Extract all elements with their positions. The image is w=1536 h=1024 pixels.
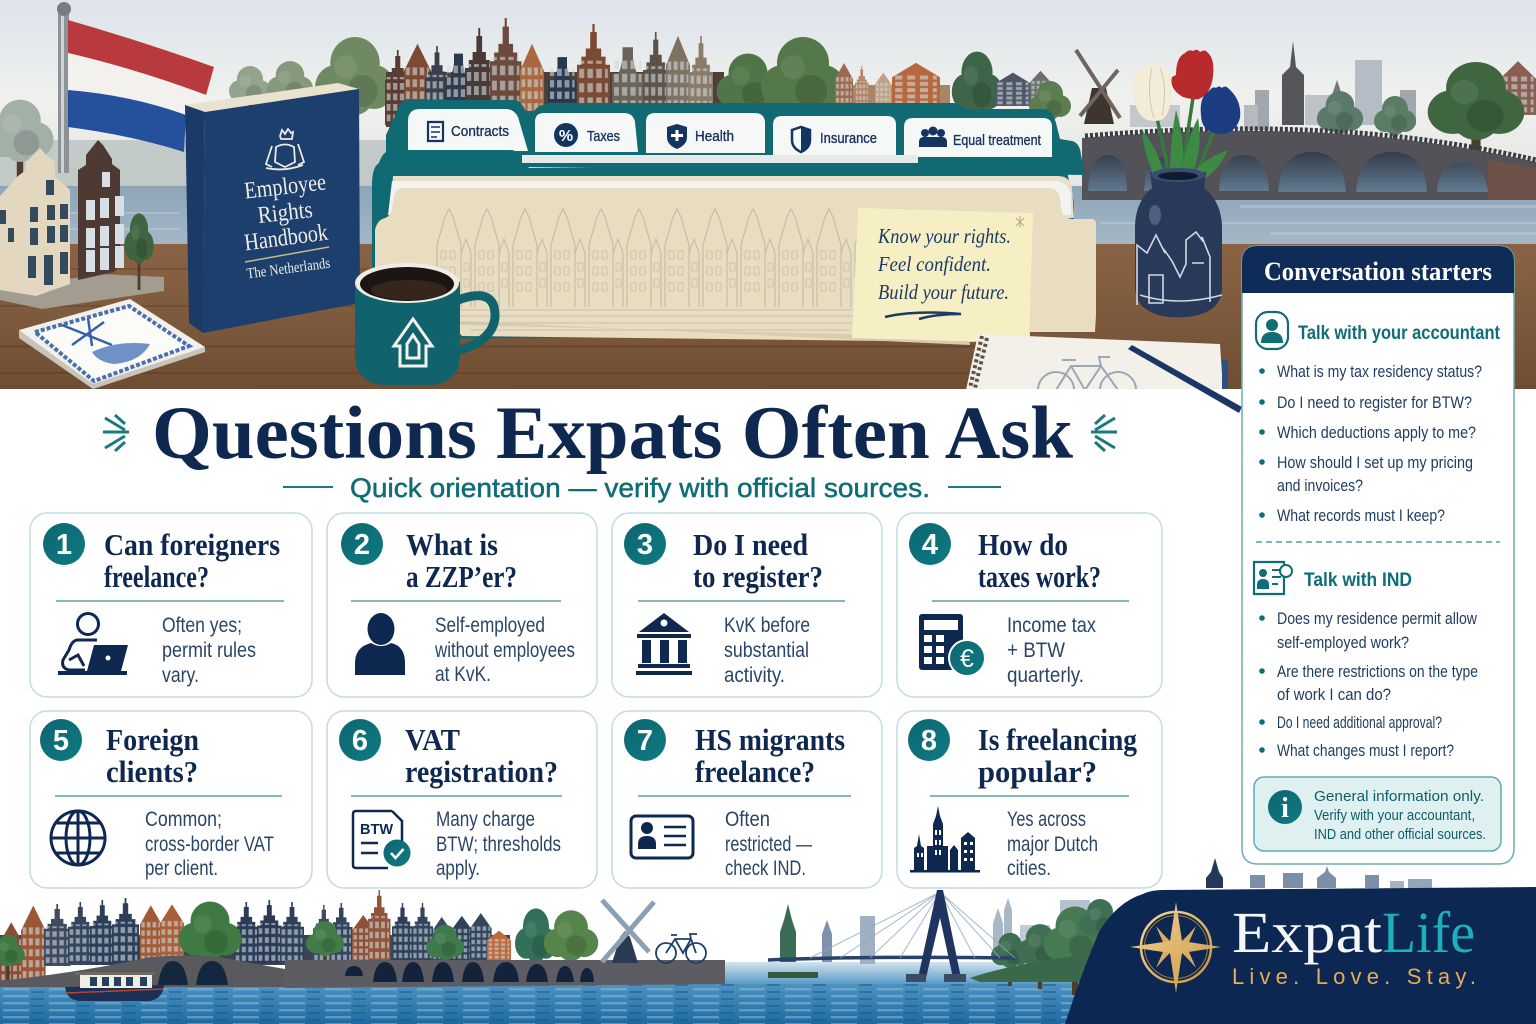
sticky note [852, 208, 1033, 343]
card 2: What is a ZZP'er: 2 [354, 529, 370, 561]
card 8: Is freelancing popular: cities. [1007, 857, 1051, 880]
disclaimer box: IND and other official sources. [1314, 826, 1486, 843]
water reflections [0, 205, 1536, 235]
left ornament [103, 415, 129, 451]
card 2: What is a ZZP'er [327, 513, 597, 697]
compass logo [1130, 902, 1221, 993]
disclaimer box: i [1281, 793, 1289, 824]
cable-stayed bridge [768, 890, 1015, 982]
file organiser [372, 100, 1096, 345]
card 5: Foreign clients: per client. [145, 857, 218, 880]
tab: Health [646, 113, 765, 153]
card 3: Do I need to register [612, 513, 882, 697]
card 6: VAT registration: VAT [405, 722, 460, 757]
card 1: Can foreigners freelance [30, 513, 312, 697]
arched stone bridge [0, 956, 725, 988]
trees and houses, top right of centre [716, 37, 1071, 155]
card 1: Can foreigners freelance: Often yes; [162, 614, 242, 637]
card 1: Can foreigners freelance: Can foreigners [104, 527, 280, 562]
card 5: Foreign clients: clients? [106, 754, 198, 789]
sidebar header [1242, 246, 1514, 293]
icon: globe [51, 811, 105, 865]
manila folder [375, 188, 1096, 342]
icon: calculator with euro [919, 614, 986, 677]
card 2: What is a ZZP'er: without employees [434, 639, 575, 662]
right ornament [1091, 415, 1117, 451]
tab: Insurance: Insurance [820, 130, 877, 147]
icon: person at laptop [58, 614, 128, 675]
card 3: Do I need to register: substantial [724, 639, 809, 662]
card 4: How do taxes work [897, 513, 1162, 697]
tab: Equal treatment: Equal treatment [953, 132, 1042, 149]
card 1: Can foreigners freelance: permit rules [162, 639, 256, 662]
house logo on mug [394, 319, 432, 366]
IND question list [1259, 609, 1478, 760]
wordmark: Expat [1232, 900, 1382, 965]
accountant question list: What records must I keep? [1277, 506, 1445, 525]
tab: Taxes [535, 113, 638, 152]
model canal houses [0, 140, 164, 309]
card 6: VAT registration: apply. [436, 857, 480, 880]
subtitle: Quick orientation — verify with official sources. [350, 473, 930, 503]
tab: Taxes: Taxes [587, 128, 620, 145]
card 3: Do I need to register: 3 [637, 529, 653, 561]
card 7: HS migrants freelance: Often [725, 808, 770, 831]
sticky note: Know your rights. [877, 224, 1011, 248]
windmill, top right [1076, 50, 1120, 124]
card 6: VAT registration [327, 711, 597, 888]
accountant question list: How should I set up my pricing [1277, 453, 1473, 472]
logo panel [1065, 887, 1536, 1024]
book title: Rights [256, 197, 314, 229]
tour boat [65, 972, 164, 1001]
icon: ID card [631, 816, 693, 858]
Delft blue tile [19, 299, 205, 389]
bottom canal illustration [0, 890, 1121, 1024]
card 4: How do taxes work: How do [978, 527, 1068, 562]
accountant question list [1259, 362, 1482, 525]
subheading: accountant: Talk with your accountant [1298, 323, 1501, 344]
card 3: Do I need to register: KvK before [724, 614, 810, 637]
card 7: HS migrants freelance: check IND. [725, 857, 806, 880]
tab: Contracts: Contracts [451, 123, 509, 140]
sky [0, 0, 1536, 195]
back teal folder [386, 100, 1085, 175]
card 5: Foreign clients [30, 711, 312, 888]
windmill [602, 900, 654, 963]
icon: accountant [1256, 312, 1288, 349]
emblem [266, 129, 304, 169]
pen [1128, 345, 1242, 413]
white tulip [1133, 63, 1172, 121]
IND question list: Are there restrictions on the type [1277, 662, 1478, 681]
card 3: Do I need to register: to register? [693, 559, 823, 594]
townhouse row [0, 890, 598, 991]
sidebar: conversation starters [1242, 246, 1514, 864]
icon: IND card [1254, 562, 1292, 594]
front teal folder [372, 150, 1074, 340]
card 3: Do I need to register: activity. [724, 664, 785, 687]
title text: Questions Expats Often Ask [152, 392, 1073, 475]
red tulip [1171, 50, 1213, 99]
disclaimer box: Verify with your accountant, [1314, 807, 1475, 824]
book title: Handbook [243, 220, 329, 256]
subheading: IND: Talk with IND [1304, 570, 1412, 591]
tab: Taxes: % [559, 128, 573, 145]
book title: The Netherlands [246, 256, 331, 282]
card 6: VAT registration: Many charge [436, 808, 535, 831]
disclaimer box: General information only. [1314, 788, 1484, 805]
IND question list: Does my residence permit allow [1277, 609, 1478, 628]
blue tulip [1201, 86, 1240, 134]
card 7: HS migrants freelance: freelance? [695, 754, 815, 789]
stone arch bridge [1082, 129, 1536, 200]
wooden table [0, 244, 1536, 389]
card 5: Foreign clients: 5 [53, 725, 69, 757]
card 2: What is a ZZP'er: at KvK. [435, 663, 491, 686]
accountant question list: and invoices? [1277, 476, 1363, 495]
tagline: Live. Love. Stay. [1232, 964, 1476, 989]
skyline silhouette above logo panel [1206, 858, 1432, 888]
IND question list: of work I can do? [1277, 685, 1391, 704]
book title [243, 169, 331, 282]
tab: Health: Health [695, 128, 734, 145]
Dutch flag on pole [57, 2, 214, 173]
card 6: VAT registration: 6 [352, 725, 368, 757]
card 1: Can foreigners freelance: 1 [56, 529, 72, 561]
card 6: VAT registration: registration? [405, 754, 558, 789]
accountant question list: Do I need to register for BTW? [1277, 393, 1472, 412]
tab: Insurance [773, 116, 896, 155]
water [0, 962, 1105, 1024]
card 8: Is freelancing popular: 8 [921, 725, 937, 757]
card 5: Foreign clients: Foreign [106, 722, 199, 757]
card 7: HS migrants freelance: HS migrants [695, 722, 845, 757]
card 4: How do taxes work: 4 [922, 529, 938, 561]
hero photo scene: desk and Dutch canal [0, 0, 1536, 413]
card 2: What is a ZZP'er: What is [406, 527, 498, 562]
stems and leaves [1157, 98, 1215, 183]
townhouses row, top centre [385, 18, 724, 128]
IND question list: Do I need additional approval? [1277, 713, 1442, 732]
handbook [185, 83, 360, 333]
card 8: Is freelancing popular [897, 711, 1162, 888]
card 1: Can foreigners freelance: freelance? [104, 559, 209, 594]
card 4: How do taxes work: taxes work? [978, 559, 1101, 594]
accountant question list: Which deductions apply to me? [1277, 423, 1476, 442]
card 6: VAT registration: BTW; thresholds [436, 833, 561, 856]
inner papers [390, 176, 1074, 218]
accountant question list: What is my tax residency status? [1277, 362, 1482, 381]
card 4: How do taxes work: + BTW [1007, 639, 1065, 662]
book title: Employee [243, 169, 327, 205]
distant left shoreline [0, 37, 395, 194]
icon: BTW document [353, 811, 410, 868]
tab: Equal treatment [904, 118, 1052, 157]
canal water [0, 186, 1536, 248]
sticky note: Feel confident. [877, 252, 991, 276]
line drawing of canal houses [435, 207, 865, 330]
icon: person silhouette [355, 613, 405, 675]
coffee mug [355, 263, 495, 385]
card 5: Foreign clients: cross-border VAT [145, 833, 274, 856]
title with ornaments [103, 392, 1117, 475]
card 8: Is freelancing popular: Is freelancing [978, 722, 1137, 757]
far skyline and trees [768, 898, 1121, 995]
sidebar header: Conversation starters [1264, 257, 1492, 286]
card 8: Is freelancing popular: Yes across [1007, 808, 1086, 831]
tab: Contracts [408, 109, 528, 151]
card 8: Is freelancing popular: major Dutch [1007, 833, 1098, 856]
card 3: Do I need to register: Do I need [693, 527, 808, 562]
card 7: HS migrants freelance: 7 [637, 725, 653, 757]
card 1: Can foreigners freelance: vary. [162, 664, 199, 687]
card 7: HS migrants freelance: restricted — [725, 833, 812, 856]
card 4: How do taxes work: quarterly. [1007, 664, 1084, 687]
card 7: HS migrants freelance [612, 711, 882, 888]
card 2: What is a ZZP'er: Self-employed [435, 614, 545, 637]
card 5: Foreign clients: Common; [145, 808, 222, 831]
icon: government building [636, 613, 692, 675]
icon: BTW document: BTW [360, 822, 393, 838]
icon: calculator with euro: € [960, 645, 974, 673]
ceramic vase [1135, 172, 1222, 318]
card 8: Is freelancing popular: popular? [978, 754, 1097, 789]
card 4: How do taxes work: Income tax [1007, 614, 1096, 637]
tulip vase [1133, 50, 1240, 317]
bicycle [656, 934, 706, 963]
icon: city skyline [910, 806, 980, 872]
sticky note: Build your future. [878, 280, 1009, 304]
notepad with bicycle sketch [966, 334, 1228, 389]
logo panel: Life [1382, 900, 1475, 965]
disclaimer box [1254, 777, 1501, 851]
IND question list: self-employed work? [1277, 633, 1409, 652]
IND question list: What changes must I report? [1277, 741, 1454, 760]
card 2: What is a ZZP'er: a ZZP’er? [406, 559, 517, 594]
city skyline, top right [1130, 41, 1536, 180]
